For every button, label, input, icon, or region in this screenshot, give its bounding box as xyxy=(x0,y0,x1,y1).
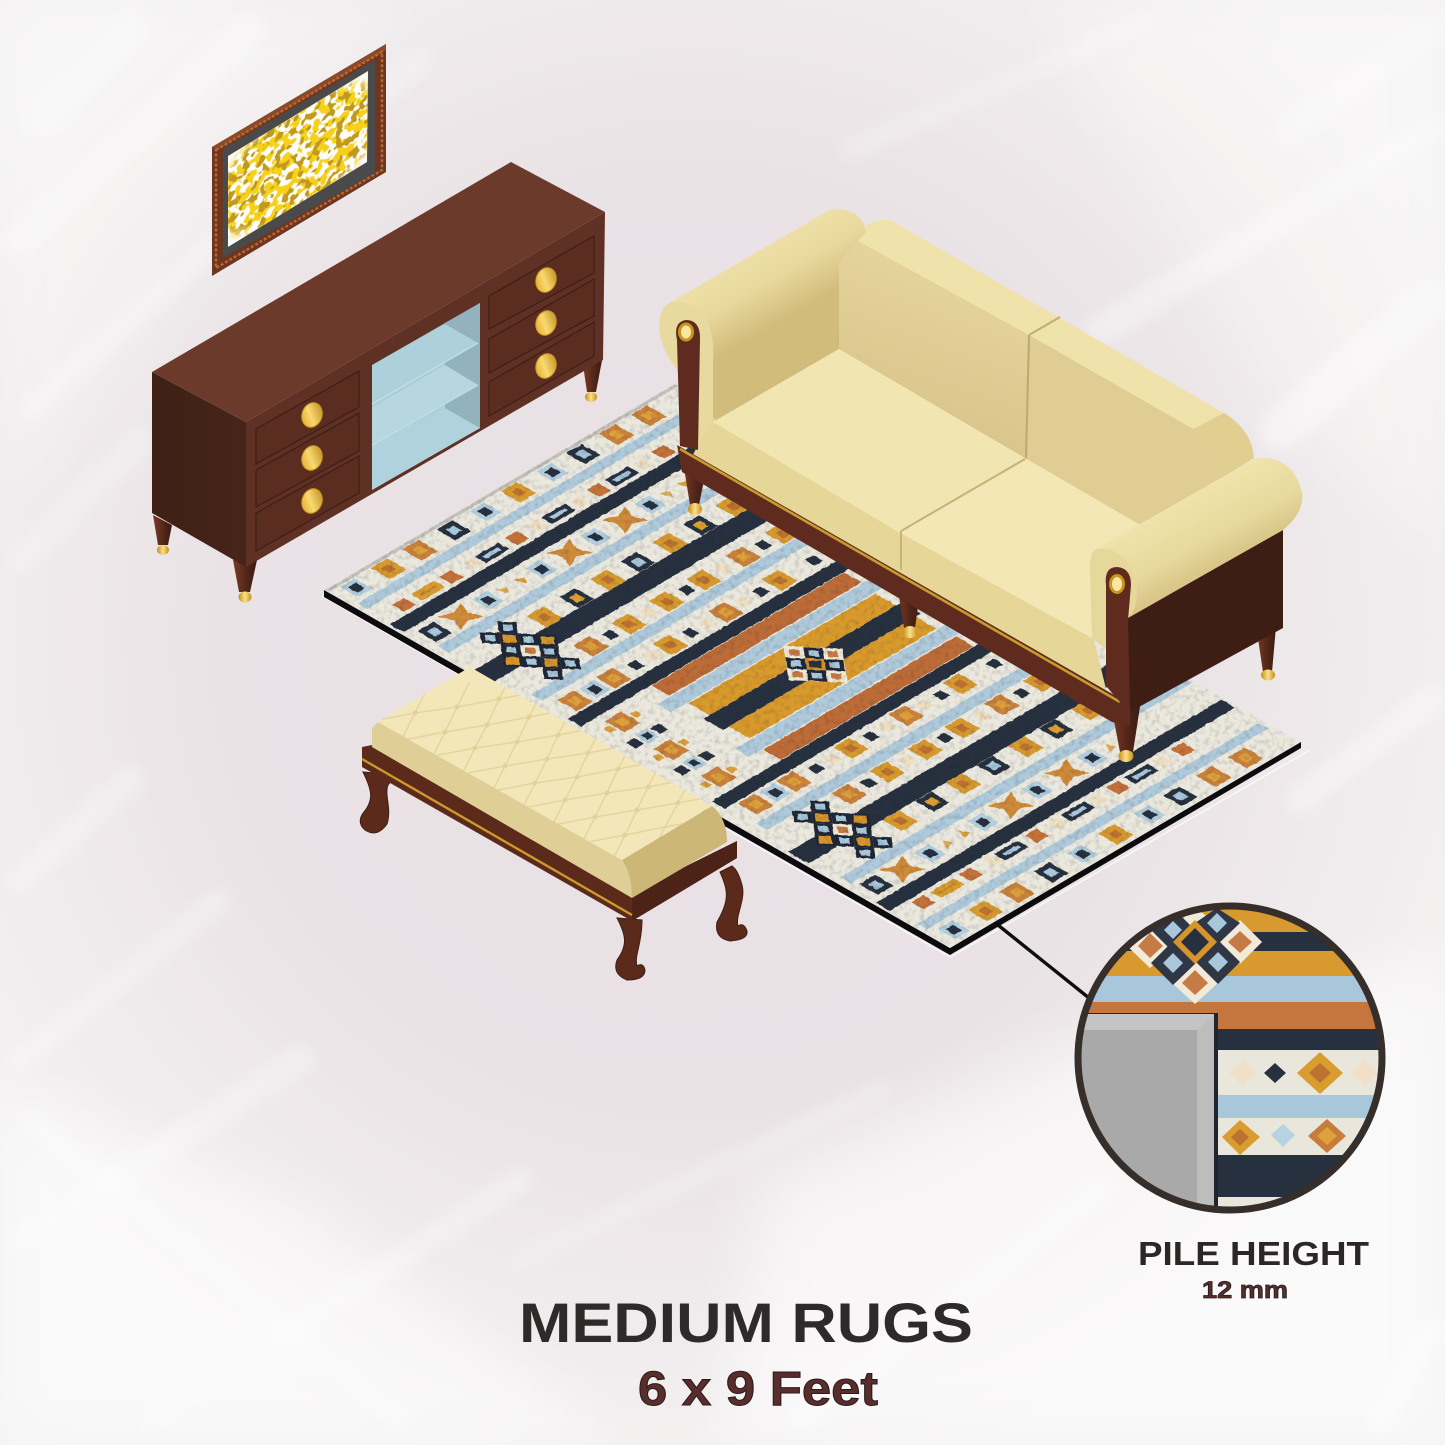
rug right half: mirrored stripes and motifs xyxy=(672,616,1268,939)
sofa back shoulder xyxy=(1193,413,1254,482)
sofa back top surface xyxy=(852,220,1224,429)
close-up folded grey backing xyxy=(1080,1013,1218,1208)
rug: 6 x 9 feet patterned rug xyxy=(322,384,1310,957)
sofa right side panel xyxy=(1126,530,1283,714)
label: pile height: PILE HEIGHT xyxy=(1138,1235,1369,1272)
bench frame xyxy=(362,745,737,921)
rug centre medallion xyxy=(784,646,848,683)
sofa back cushions xyxy=(839,240,1218,526)
sofa left arm roll xyxy=(671,209,866,422)
sofa right arm cap xyxy=(1090,549,1137,650)
sofa left scroll post xyxy=(676,320,700,450)
cabinet left drawers xyxy=(256,371,359,551)
sofa legs xyxy=(682,455,1277,762)
sofa bottom rail with gold inlay xyxy=(677,445,1130,726)
sofa right scroll post xyxy=(1106,567,1131,706)
cabinet right drawers xyxy=(489,236,594,416)
rug left half: stripes and motif rows xyxy=(331,387,976,762)
bench cushion front and end xyxy=(372,722,727,898)
wall painting with gold frame xyxy=(212,44,386,276)
sofa seat cushions xyxy=(690,349,1142,705)
close-up medallion xyxy=(1127,908,1262,1004)
cabinet glass shelves xyxy=(372,303,480,490)
sofa left arm cap xyxy=(659,302,713,460)
subtitle: rug size: 6 x 9 Feet xyxy=(638,1363,878,1416)
cabinet legs xyxy=(153,355,603,602)
sofa xyxy=(659,209,1302,762)
callout leader line xyxy=(998,925,1089,998)
label: 12 mm: 12 mm xyxy=(1202,1277,1288,1304)
sofa right arm roll xyxy=(1096,458,1302,618)
bench quilting xyxy=(382,682,700,856)
rug face xyxy=(325,384,1300,948)
callout: circular close-up of rug corner xyxy=(1078,906,1382,1210)
cabinet brass knobs xyxy=(299,265,559,516)
close-up motifs xyxy=(1222,1052,1379,1155)
bench with quilted cushion xyxy=(360,667,747,980)
rug centre clusters xyxy=(652,738,690,762)
bench cushion top xyxy=(378,667,712,860)
sideboard cabinet xyxy=(152,162,605,602)
painting gold blotches xyxy=(228,71,368,247)
title: medium rugs: MEDIUM RUGS xyxy=(519,1291,973,1354)
rug thickness and edge xyxy=(322,590,1310,957)
bench legs xyxy=(360,772,747,980)
close-up rug bands xyxy=(1080,908,1380,1197)
rug centre bar xyxy=(704,602,921,730)
